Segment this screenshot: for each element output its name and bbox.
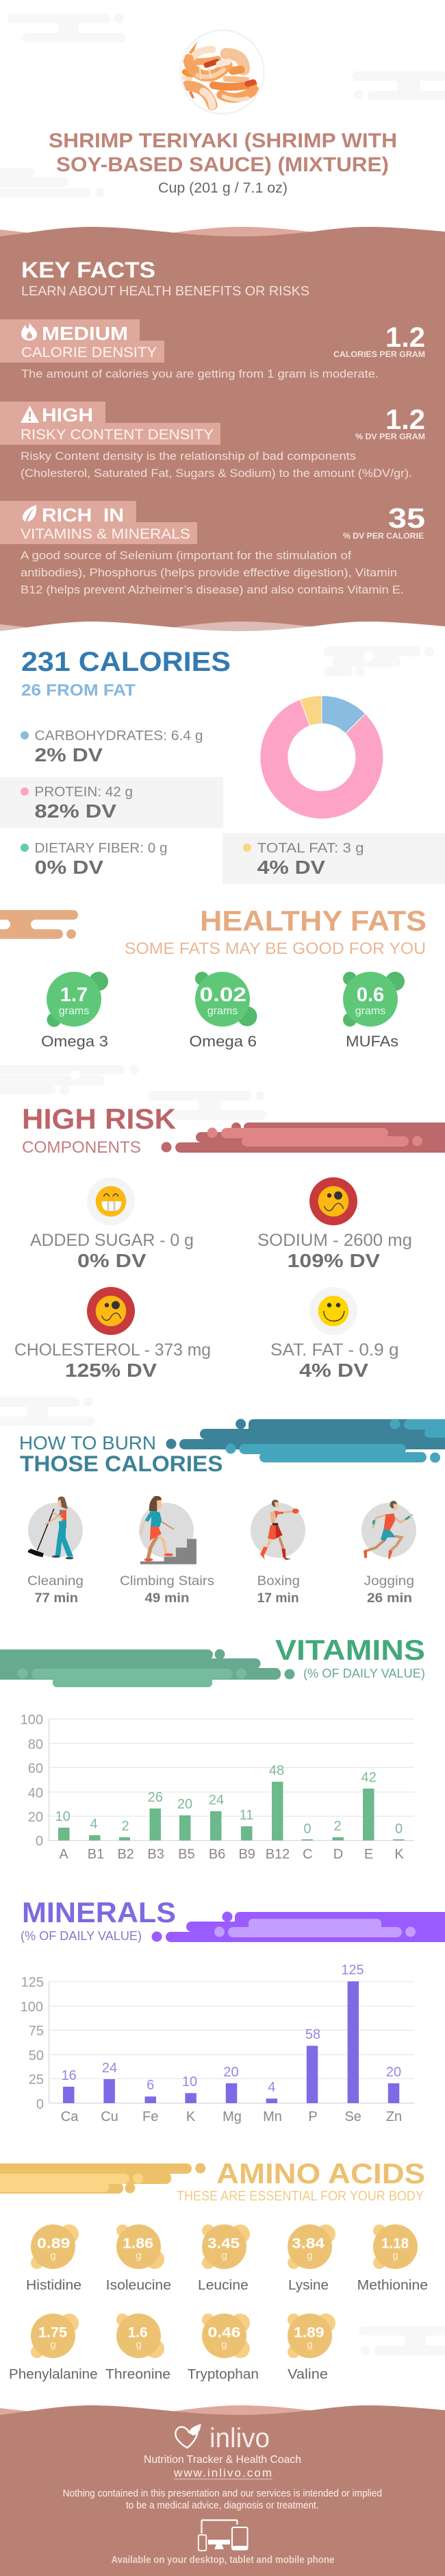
fact: risky content density <box>0 402 425 480</box>
activity: boxing <box>251 1499 305 1606</box>
bar chart: minerals: 20 <box>223 2065 239 2080</box>
fact: rich in vitamins and minerals: % DV PER CALORIE <box>343 531 424 541</box>
panel: amino acids <box>0 2157 445 2382</box>
amino: threonine: 1.6 <box>128 2325 148 2341</box>
heading: how to burn <box>19 1432 223 1476</box>
fact: calorie density: MEDIUM <box>42 323 128 344</box>
amino: leucine: 3.45 <box>207 2236 240 2252</box>
heading: healthy fats <box>125 905 427 958</box>
amino: tryptophan <box>188 2314 259 2382</box>
heading: key facts <box>21 258 309 299</box>
bar chart: minerals: 4 <box>268 2080 275 2095</box>
heading: high risk: HIGH RISK <box>22 1103 176 1135</box>
amino: methionine: Methionine <box>357 2278 428 2293</box>
bar chart: vitamins: 48 <box>269 1763 284 1778</box>
availability note: Available on your desktop, tablet and mobile phone <box>111 2554 334 2566</box>
fat: omega 6 <box>189 972 257 1050</box>
icon: person climbing stairs <box>140 1496 196 1565</box>
macro: protein: 82% DV <box>34 800 116 822</box>
heading: key facts: LEARN ABOUT HEALTH BENEFITS OR RISKS <box>21 284 309 299</box>
fact: calorie density: 1.2 <box>385 321 425 353</box>
activity: cleaning <box>27 1497 84 1606</box>
bar chart: minerals: 0 <box>36 2097 44 2112</box>
bar chart: vitamins: B12 <box>266 1847 290 1862</box>
amino: tryptophan: Tryptophan <box>188 2367 259 2382</box>
component: cholesterol: 125% DV <box>65 1360 157 1381</box>
component: sodium: SODIUM - 2600 mg <box>257 1231 412 1250</box>
fat: mufas: grams <box>355 1005 385 1017</box>
fact: risky content density: Risky Content density is the relationship of bad components <box>21 450 356 463</box>
amino: valine <box>288 2314 335 2382</box>
heading: healthy fats: HEALTHY FATS <box>200 905 427 937</box>
icon: person sweeping <box>28 1497 73 1559</box>
amino: phenylalanine: Phenylalanine <box>9 2367 98 2382</box>
panel: calories <box>0 646 445 884</box>
heading: minerals <box>21 1896 176 1943</box>
bar chart: minerals: 10 <box>182 2074 197 2089</box>
fact: rich in vitamins and minerals: 35 <box>388 502 425 534</box>
amino: leucine: g <box>221 2250 227 2261</box>
bar chart: vitamins: E <box>364 1847 373 1862</box>
component: cholesterol: CHOLESTEROL - 373 mg <box>14 1340 211 1360</box>
bar chart: minerals: Mn <box>263 2109 282 2124</box>
amino: tryptophan: 0.46 <box>208 2325 241 2341</box>
fact: calorie density: The amount of calories you are getting from 1 gram is moderate. <box>21 367 379 380</box>
panel: vitamins <box>0 1634 425 1862</box>
bar chart: vitamins: 20 <box>28 1810 43 1825</box>
fat: omega 3 <box>41 972 108 1050</box>
heading: amino acids: THESE ARE ESSENTIAL FOR YOUR BODY <box>177 2189 424 2204</box>
donut chart <box>260 696 383 819</box>
amino: leucine: Leucine <box>198 2278 249 2293</box>
fact: calorie density: CALORIE DENSITY <box>21 344 157 360</box>
bar chart: vitamins: 10 <box>55 1809 71 1824</box>
disclaimer: Nothing contained in this presentation and our services is intended or implied <box>63 2488 382 2499</box>
bar chart: vitamins: B1 <box>88 1847 104 1862</box>
fact: risky content density: RISKY CONTENT DENSITY <box>21 426 214 443</box>
bar chart: vitamins: 0 <box>395 1821 403 1837</box>
heading: minerals: (% OF DAILY VALUE) <box>21 1929 142 1943</box>
heading: key facts: KEY FACTS <box>21 258 155 282</box>
bar chart: minerals: 24 <box>102 2061 117 2076</box>
title: SOY-BASED SAUCE) (MIXTURE) <box>56 154 389 176</box>
macro: dietary fiber: DIETARY FIBER: 0 g <box>34 841 167 856</box>
heading: calories <box>21 647 231 700</box>
bar chart: vitamins: 0 <box>303 1821 312 1837</box>
amino: leucine <box>198 2224 250 2293</box>
macro: carbohydrates: CARBOHYDRATES: 6.4 g <box>34 728 203 744</box>
panel: high risk components <box>0 1065 445 1381</box>
heading: amino acids <box>177 2157 425 2204</box>
bar chart: vitamins: 2 <box>121 1819 129 1834</box>
fat: mufas: 0.6 <box>357 984 384 1006</box>
bar chart: vitamins: 80 <box>28 1737 43 1752</box>
fact: risky content density: (Cholesterol, Saturated Fat, Sugars & Sodium) to the amount (%DV/gr). <box>21 467 412 480</box>
bar chart: vitamins: 24 <box>209 1793 224 1808</box>
fact: rich in vitamins and minerals <box>0 501 425 596</box>
amino: valine: g <box>307 2339 313 2351</box>
website link: www.inlivo.com <box>173 2466 272 2479</box>
bar chart: minerals: 58 <box>305 2027 320 2042</box>
fat: omega 3: grams <box>59 1005 89 1017</box>
component: saturated fat: SAT. FAT - 0.9 g <box>270 1340 398 1360</box>
macro: total fat: TOTAL FAT: 3 g <box>257 841 364 856</box>
amino: valine: Valine <box>288 2367 328 2382</box>
bar chart: minerals: 25 <box>29 2072 44 2087</box>
heading: amino acids: AMINO ACIDS <box>216 2157 425 2189</box>
amino: lysine: Lysine <box>288 2278 329 2293</box>
icon: devices <box>199 2520 248 2551</box>
amino: lysine: 3.84 <box>292 2236 325 2252</box>
fact: rich in vitamins and minerals: VITAMINS & MINERALS <box>21 526 190 542</box>
icon: warning triangle <box>21 406 39 423</box>
amino: tryptophan: g <box>221 2339 227 2351</box>
bar chart: minerals: Cu <box>101 2109 118 2124</box>
fact: rich in vitamins and minerals: RICH IN <box>42 504 124 526</box>
bar chart: vitamins: K <box>394 1847 404 1862</box>
icon: runner <box>364 1501 413 1559</box>
panel: healthy fats <box>0 905 427 1050</box>
fact: calorie density: CALORIES PER GRAM <box>333 349 425 359</box>
fact: risky content density: HIGH <box>42 404 93 426</box>
bar chart: minerals: 20 <box>386 2065 401 2080</box>
bar chart: vitamins: B5 <box>178 1847 195 1862</box>
amino: phenylalanine: 1.75 <box>38 2325 67 2341</box>
bar chart: vitamins: D <box>333 1847 343 1862</box>
disclaimer: to be a medical advice, diagnosis or treatment. <box>126 2500 319 2512</box>
activity: cleaning: Cleaning <box>27 1573 84 1588</box>
icon: worried face <box>87 1287 135 1335</box>
icon: inlivo heart logo <box>175 2424 201 2448</box>
amino: threonine: g <box>136 2339 142 2351</box>
component: sodium: 109% DV <box>288 1250 380 1271</box>
title <box>49 130 397 176</box>
icon: flame <box>21 322 37 341</box>
icon: shrimp photo <box>181 30 264 114</box>
bar chart: minerals: Se <box>344 2109 361 2124</box>
header panel <box>49 29 396 196</box>
amino: histidine: 0.89 <box>37 2236 70 2252</box>
panel: how to burn those calories <box>0 1397 445 1606</box>
amino: histidine: Histidine <box>26 2278 81 2293</box>
amino: lysine <box>288 2224 335 2293</box>
amino: histidine <box>26 2224 81 2293</box>
bar chart: vitamins: 2 <box>333 1819 342 1834</box>
logo wordmark: inlivo <box>209 2423 270 2453</box>
amino: isoleucine <box>106 2224 171 2293</box>
decoration: red bars <box>162 1123 445 1153</box>
component: saturated fat: 4% DV <box>299 1360 368 1381</box>
heading: vitamins <box>275 1634 425 1680</box>
component: added sugar: 0% DV <box>77 1250 147 1271</box>
amino: valine: 1.89 <box>294 2325 325 2341</box>
bar chart: minerals: 6 <box>147 2078 154 2093</box>
bar chart: vitamins: 4 <box>90 1817 98 1832</box>
heading: vitamins: VITAMINS <box>275 1634 425 1666</box>
serving size: Cup (201 g / 7.1 oz) <box>158 180 288 196</box>
fat: omega 6: grams <box>207 1005 238 1017</box>
amino: phenylalanine <box>9 2314 98 2382</box>
component: sodium <box>257 1177 412 1271</box>
component: saturated fat <box>270 1287 398 1381</box>
bar chart: vitamins: 40 <box>28 1786 43 1801</box>
bar chart: vitamins <box>21 1713 414 1862</box>
bar chart: vitamins: 20 <box>177 1797 192 1812</box>
bar chart: vitamins: 26 <box>148 1790 163 1805</box>
amino: methionine <box>357 2224 428 2293</box>
title: SHRIMP TERIYAKI (SHRIMP WITH <box>49 130 397 152</box>
fat: mufas <box>343 972 405 1050</box>
amino: threonine <box>105 2314 170 2382</box>
bar chart: vitamins: 11 <box>240 1808 253 1823</box>
macro: dietary fiber: 0% DV <box>34 857 103 878</box>
bar chart: vitamins: B3 <box>147 1847 164 1862</box>
bar chart: vitamins: 42 <box>361 1770 377 1785</box>
decoration: green bars <box>0 1649 294 1687</box>
fat: mufas: MUFAs <box>346 1033 398 1050</box>
bar chart: minerals: 125 <box>341 1963 364 1978</box>
fact: risky content density: 1.2 <box>385 404 425 435</box>
activity: jogging <box>361 1501 416 1606</box>
component: cholesterol <box>14 1287 211 1381</box>
bar chart: minerals: K <box>186 2109 196 2124</box>
icon: worried face <box>309 1177 357 1225</box>
fact: rich in vitamins and minerals: antibodies), Phosphorus (helps provide effective digestion), Vitamin <box>21 566 397 579</box>
macro: total fat <box>222 833 445 884</box>
bar chart: vitamins: A <box>59 1847 68 1862</box>
fact: calorie density <box>0 319 425 380</box>
decoration: orange bars <box>0 910 82 939</box>
macro: protein <box>0 777 223 828</box>
amino: isoleucine: Isoleucine <box>106 2278 171 2293</box>
macro: total fat: 4% DV <box>257 857 325 878</box>
heading: calories: 26 FROM FAT <box>21 681 136 700</box>
amino: histidine: g <box>50 2250 56 2261</box>
decoration: teal bars <box>166 1419 445 1462</box>
heading: how to burn: THOSE CALORIES <box>20 1451 223 1476</box>
amino: lysine: g <box>307 2250 313 2261</box>
icon: leaf <box>23 505 36 522</box>
bar chart: minerals: 16 <box>62 2068 77 2083</box>
panel: minerals <box>21 1896 445 2124</box>
component: added sugar <box>30 1177 194 1271</box>
activity: climbing stairs <box>120 1496 214 1606</box>
fat: omega 6: Omega 6 <box>189 1033 257 1050</box>
bar chart: vitamins: 0 <box>36 1834 43 1849</box>
decoration: purple bars <box>152 1912 445 1942</box>
bar chart: minerals <box>21 1963 414 2124</box>
fact: rich in vitamins and minerals: A good source of Selenium (important for the stimulation of <box>21 549 351 562</box>
bar chart: minerals: Zn <box>386 2109 402 2124</box>
heading: how to burn: HOW TO BURN <box>19 1432 156 1453</box>
fat: omega 3: Omega 3 <box>41 1033 108 1050</box>
bar chart: minerals: Mg <box>222 2109 242 2124</box>
amino: methionine: 1.18 <box>381 2236 409 2252</box>
activity: climbing stairs: Climbing Stairs <box>120 1573 214 1588</box>
bar chart: minerals: P <box>308 2109 318 2124</box>
activity: boxing: 17 min <box>257 1591 299 1606</box>
bar chart: vitamins: 100 <box>21 1713 43 1728</box>
fact: rich in vitamins and minerals: B12 (helps prevent Alzheimer’s disease) and also contains Vitamin E. <box>21 583 404 596</box>
disclaimer <box>63 2488 382 2512</box>
macro: carbohydrates: 2% DV <box>34 744 103 765</box>
icon: smiling face <box>309 1287 357 1335</box>
heading: minerals: MINERALS <box>22 1896 176 1928</box>
activity: climbing stairs: 49 min <box>145 1591 189 1606</box>
tagline: Nutrition Tracker & Health Coach <box>144 2454 301 2466</box>
bar chart: vitamins: B6 <box>209 1847 225 1862</box>
macro: protein: PROTEIN: 42 g <box>34 785 133 800</box>
bar chart: minerals: Fe <box>142 2109 158 2124</box>
panel: key facts <box>0 227 445 637</box>
heading: healthy fats: SOME FATS MAY BE GOOD FOR YOU <box>125 940 426 958</box>
activity: jogging: Jogging <box>364 1573 414 1588</box>
decoration: yellow bars <box>0 2163 205 2194</box>
fat: omega 3: 1.7 <box>60 984 88 1006</box>
panel: footer <box>0 2405 445 2576</box>
heading: high risk <box>22 1103 176 1157</box>
bar chart: vitamins: 60 <box>28 1761 43 1776</box>
icon: grinning face <box>87 1177 135 1225</box>
component: added sugar: ADDED SUGAR - 0 g <box>30 1231 194 1250</box>
bar chart: vitamins: B2 <box>117 1847 134 1862</box>
bar chart: minerals: Ca <box>61 2109 79 2124</box>
macro: dietary fiber <box>21 841 167 878</box>
amino: isoleucine: g <box>136 2250 142 2261</box>
activity: cleaning: 77 min <box>34 1591 78 1606</box>
amino: phenylalanine: g <box>50 2339 56 2351</box>
icon: boxer <box>260 1499 299 1560</box>
heading: calories: 231 CALORIES <box>21 647 231 677</box>
bar chart: vitamins: C <box>303 1847 313 1862</box>
bar chart: minerals: 50 <box>29 2048 44 2063</box>
heading: high risk: COMPONENTS <box>22 1138 141 1157</box>
macro: carbohydrates <box>21 728 203 765</box>
activity: boxing: Boxing <box>257 1573 300 1588</box>
amino: methionine: g <box>392 2250 398 2261</box>
fat: omega 6: 0.02 <box>200 984 246 1006</box>
amino: threonine: Threonine <box>105 2367 170 2382</box>
bar chart: minerals: 125 <box>21 1975 44 1990</box>
bar chart: vitamins: B9 <box>238 1847 255 1862</box>
amino: isoleucine: 1.86 <box>123 2236 153 2252</box>
bar chart: minerals: 100 <box>21 2000 43 2015</box>
fact: risky content density: % DV PER GRAM <box>355 432 425 441</box>
activity: jogging: 26 min <box>367 1591 412 1606</box>
heading: vitamins: (% OF DAILY VALUE) <box>303 1667 425 1680</box>
bar chart: minerals: 75 <box>29 2024 44 2039</box>
